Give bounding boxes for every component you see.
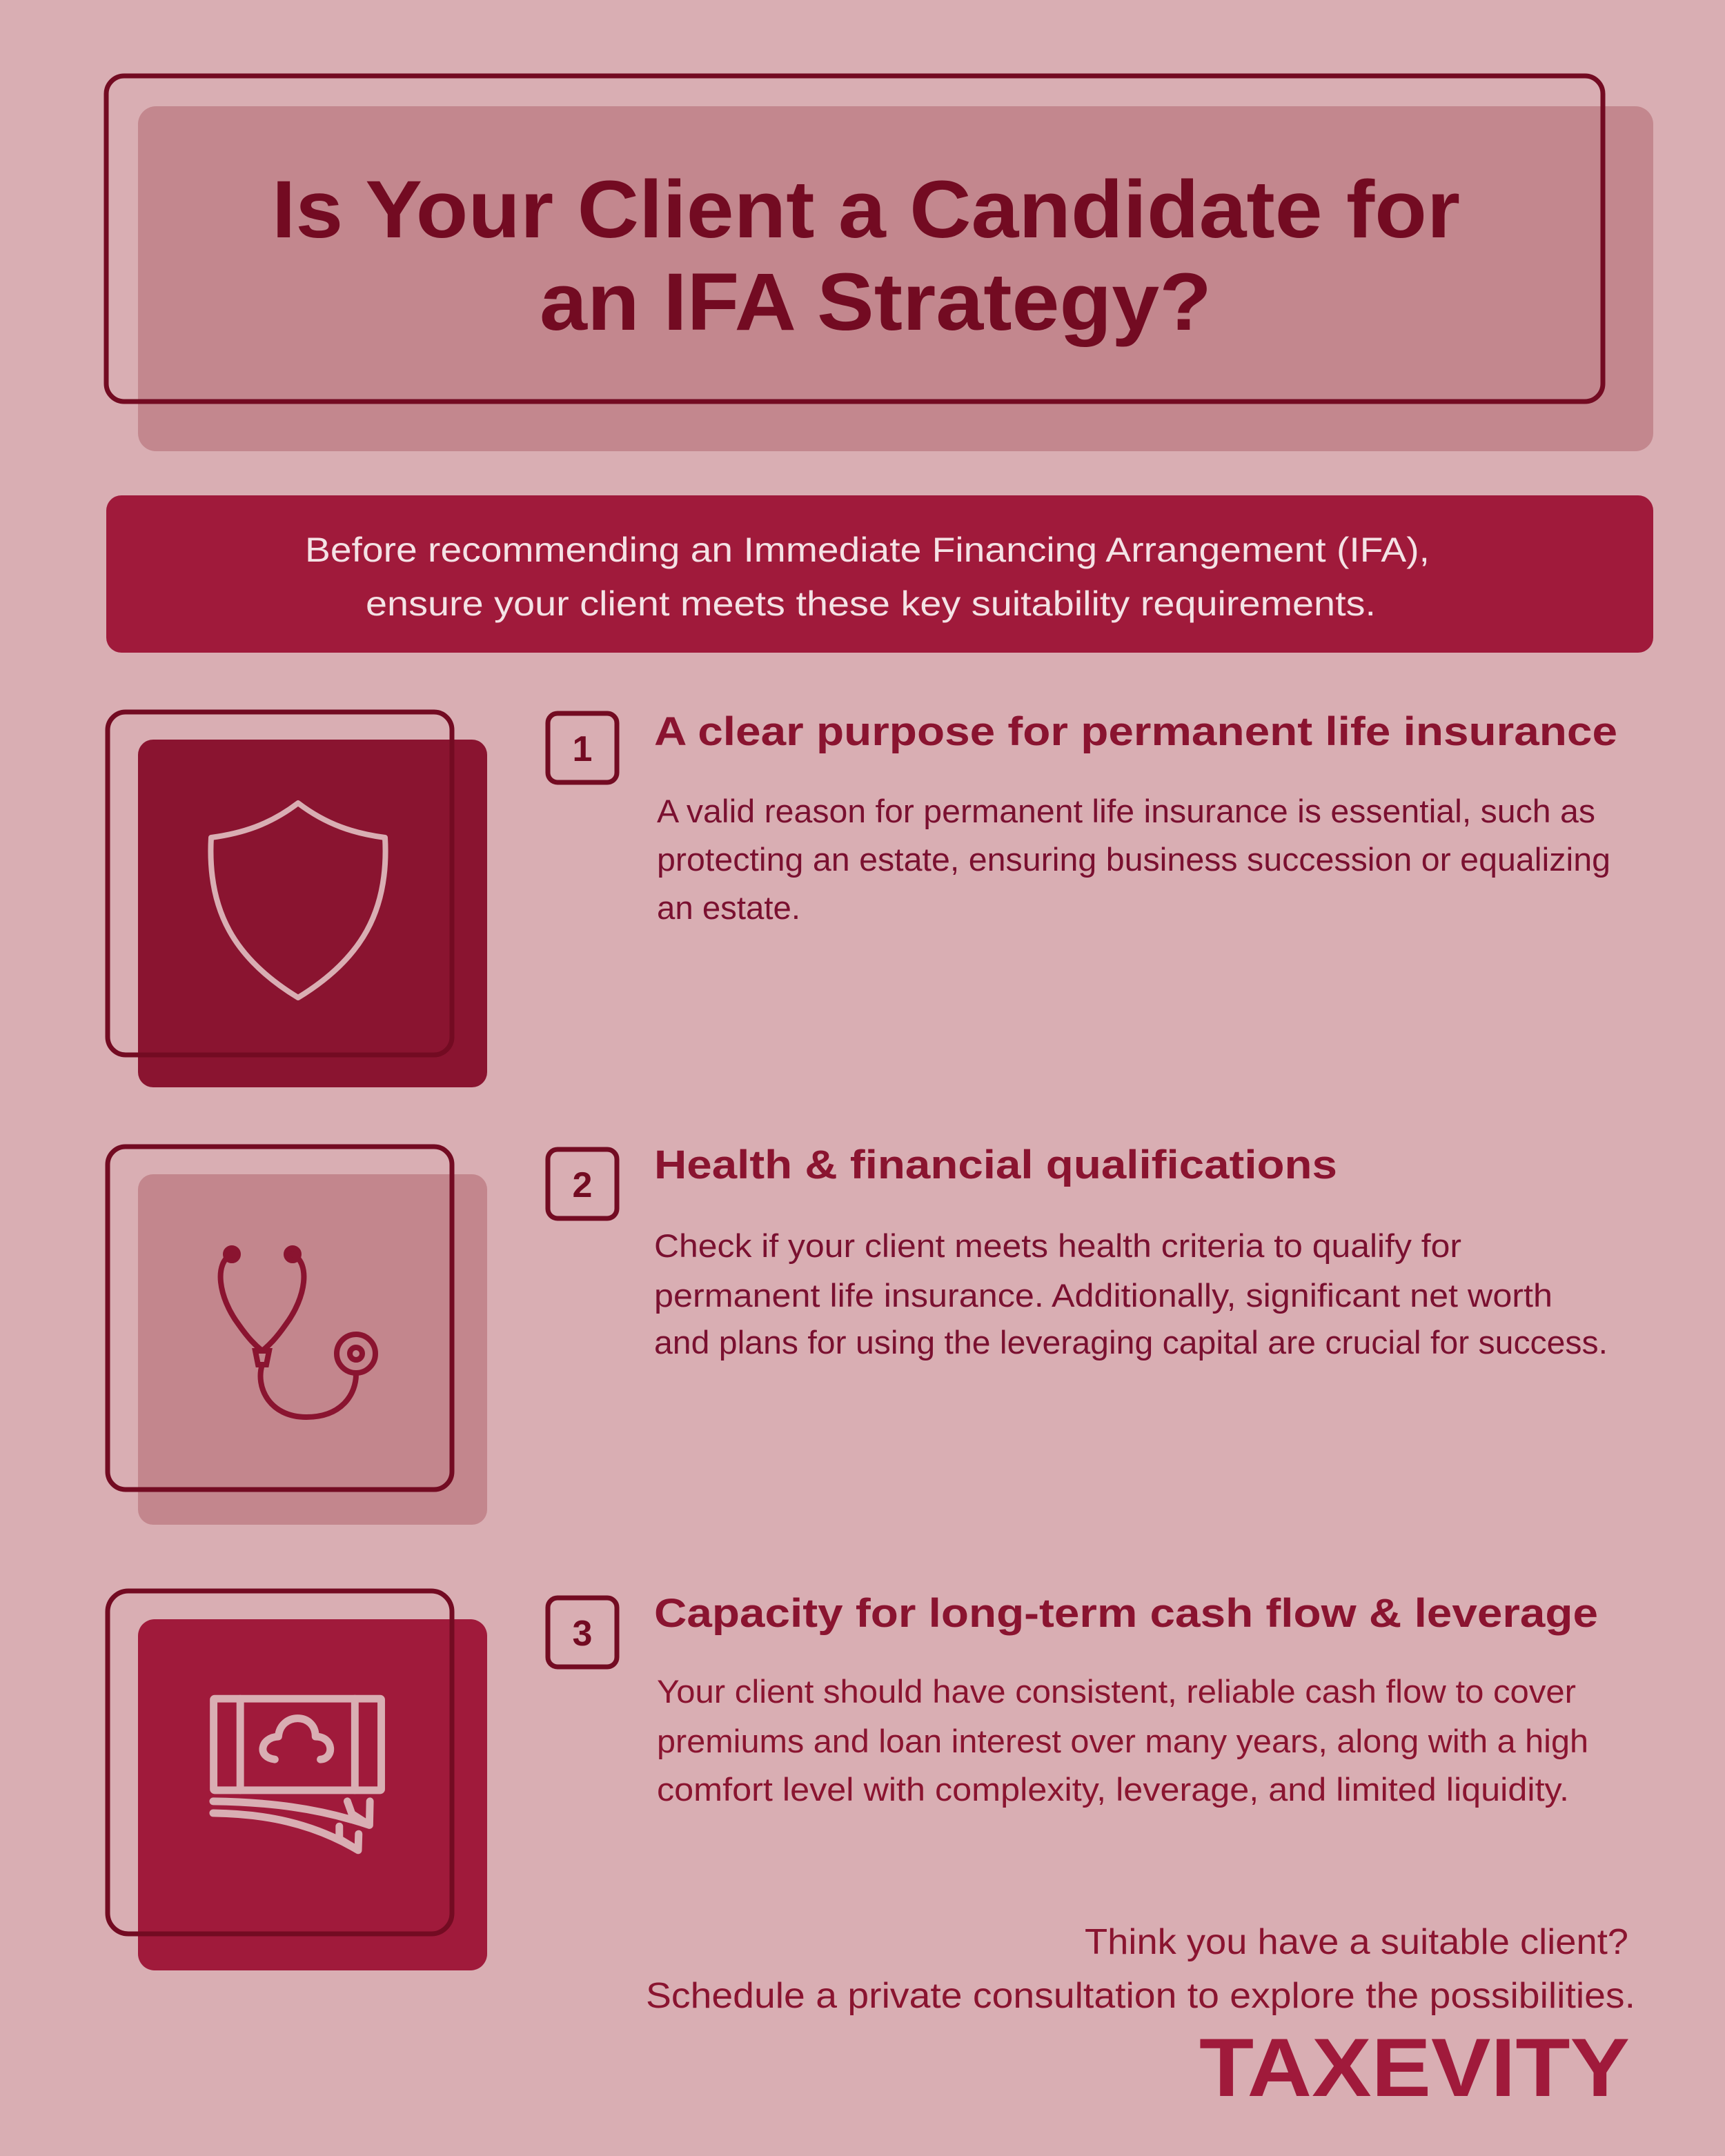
item 3 number badge: 3 (573, 1614, 592, 1654)
title: an IFA Strategy? (540, 257, 1212, 348)
icon: stethoscope (221, 1248, 375, 1417)
item 3 body: Your client should have consistent, reliable cash flow to cover (657, 1673, 1576, 1710)
item 2 body (654, 1227, 1608, 1361)
footer call to action: Think you have a suitable client? (1085, 1922, 1628, 1962)
item 1 number badge (548, 713, 617, 782)
item 2 number badge: 2 (573, 1165, 592, 1205)
icon: banknotes (213, 1699, 382, 1850)
item 1 icon box: shield (108, 712, 487, 1087)
item 2 icon box: stethoscope (108, 1147, 487, 1525)
item 1 body: A valid reason for permanent life insurance is essential, such as (657, 793, 1595, 829)
item 1 number badge: 1 (573, 729, 592, 769)
item 3 number badge (548, 1598, 617, 1667)
item 3 body: premiums and loan interest over many years, along with a high (657, 1723, 1588, 1759)
intro banner: ensure your client meets these key suitability requirements. (366, 584, 1376, 623)
item 3 icon box: money (108, 1591, 487, 1970)
item 2 body: Check if your client meets health criteria to qualify for (654, 1227, 1461, 1264)
footer call to action: Schedule a private consultation to explore the possibilities. (646, 1976, 1635, 2016)
footer call to action (646, 1922, 1635, 2016)
title: Is Your Client a Candidate for (272, 164, 1460, 255)
icon: shield (210, 803, 386, 998)
item 3 body: comfort level with complexity, leverage, and limited liquidity. (657, 1771, 1569, 1808)
item 2 number badge (548, 1149, 617, 1218)
item 3 heading: Capacity for long-term cash flow & leverage (654, 1591, 1598, 1636)
item 2 heading: Health & financial qualifications (654, 1143, 1337, 1187)
item 1 body: an estate. (657, 889, 800, 926)
item 2 body: permanent life insurance. Additionally, significant net worth (654, 1277, 1552, 1314)
item 1 heading: A clear purpose for permanent life insurance (654, 709, 1617, 754)
intro banner (106, 495, 1653, 653)
item 2 body: and plans for using the leveraging capital are crucial for success. (654, 1324, 1608, 1361)
intro banner: Before recommending an Immediate Financing Arrangement (IFA), (305, 531, 1430, 569)
title (272, 164, 1460, 348)
item 1 body: protecting an estate, ensuring business succession or equalizing (657, 841, 1610, 878)
title panel (106, 76, 1653, 451)
item 1 body (657, 793, 1610, 926)
item 3 body (657, 1673, 1588, 1808)
logo: TAXEVITY: TAXEVITY (1199, 2021, 1630, 2114)
